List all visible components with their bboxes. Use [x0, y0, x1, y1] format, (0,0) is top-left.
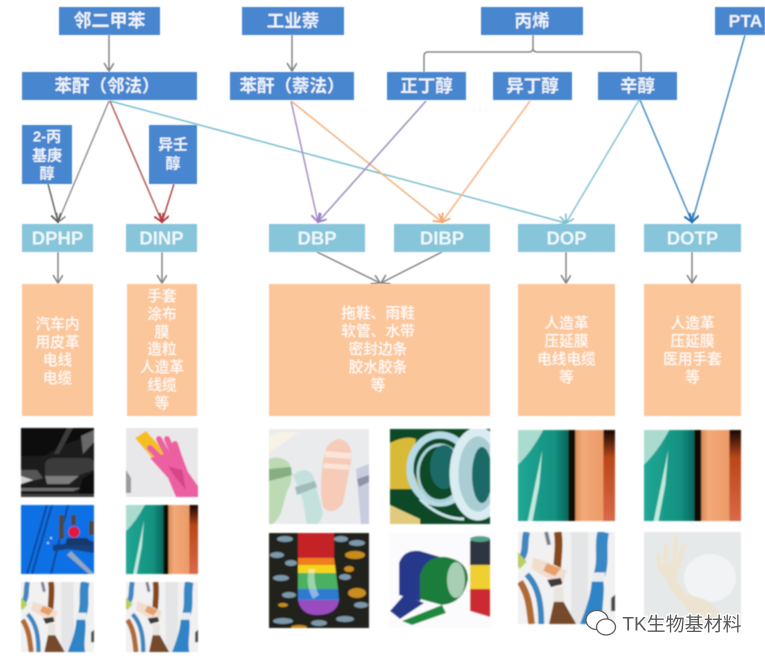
connector arrows — [48, 35, 745, 283]
box: 异壬醇: 异壬 — [158, 136, 188, 154]
box: PTA: PTA — [729, 11, 763, 31]
arrow: 工业萘 to 苯酐（萘法） — [291, 35, 293, 71]
application panels — [22, 284, 741, 416]
box: 2-丙基庚醇 — [22, 125, 72, 184]
arrow: 苯酐（邻法） to DPHP — [58, 101, 109, 222]
arrow: 苯酐（邻法） to DINP — [110, 101, 162, 222]
panel: DINP uses — [127, 284, 197, 416]
box: DINP: DINP — [139, 228, 184, 248]
box: 邻二甲苯 — [59, 7, 160, 35]
panel: DPHP uses: 汽车内 — [35, 316, 80, 333]
arrow: 异丁醇 to DIBP — [442, 101, 530, 222]
panel: DPHP uses — [22, 284, 93, 416]
arrow: 2-丙基庚醇 to DPHP — [48, 184, 58, 222]
text: TK生物基材料: TK生物基材料 — [622, 614, 742, 636]
panel: DOTP uses — [644, 284, 741, 416]
box: DOP — [518, 224, 615, 252]
box: 苯酐（邻法） — [22, 72, 197, 100]
box: 苯酐（邻法）: 苯酐（邻法） — [54, 76, 160, 96]
panel: DOTP uses: 人造革 — [670, 315, 715, 332]
box: 苯酐（萘法）: 苯酐（萘法） — [240, 76, 344, 96]
box: 正丁醇: 正丁醇 — [400, 76, 453, 96]
box: DINP — [126, 224, 197, 252]
box: 辛醇 — [598, 72, 677, 100]
panel: DINP uses: 等 — [155, 394, 170, 412]
panel: DBP and DIBP uses — [269, 284, 490, 416]
box: 异丁醇: 异丁醇 — [506, 76, 559, 96]
panel: DINP uses: 涂布 — [147, 305, 177, 323]
arrow: 苯酐（萘法） to DIBP — [291, 101, 442, 222]
box: 异丁醇 — [493, 72, 572, 100]
panel: DPHP uses: 电缆 — [43, 370, 72, 387]
panel: DBP and DIBP uses: 软管、水带 — [341, 322, 415, 340]
photo: pink glove and sponge — [125, 428, 199, 498]
box: DBP: DBP — [297, 228, 337, 248]
arrow: PTA to DOTP — [692, 35, 745, 222]
arrow: 苯酐（邻法） to DOP — [110, 101, 566, 223]
box: DPHP — [22, 224, 93, 252]
box: DIBP — [394, 224, 490, 252]
panel: DOP uses: 电线电缆 — [537, 351, 596, 368]
panel: DINP uses: 线缆 — [147, 377, 177, 394]
arrow: DOTP to uses — [691, 252, 693, 283]
photo: cables, DINP — [126, 582, 198, 652]
box: 异壬醇: 醇 — [165, 154, 181, 172]
photo: pastel slippers — [268, 429, 370, 525]
photo: white medical gloves — [644, 532, 742, 624]
icon: WeChat bubbles — [586, 610, 616, 635]
panel: DOP uses: 等 — [559, 368, 574, 386]
box: DOTP — [644, 224, 741, 252]
arrow: 异壬醇 to DINP — [162, 184, 174, 222]
photo: leather, DINP — [126, 505, 198, 574]
panel: DINP uses: 人造革 — [140, 359, 184, 376]
panel: DOTP uses: 医用手套 — [663, 351, 722, 368]
box: 正丁醇 — [387, 72, 466, 100]
panel: DOTP uses: 等 — [685, 368, 700, 386]
arrow: 辛醇 to DOP — [566, 100, 639, 223]
arrow: DBP to uses — [317, 252, 380, 283]
box: DBP — [269, 224, 365, 252]
panel: DINP uses: 造粒 — [147, 341, 177, 358]
box: 丙烯 — [481, 7, 583, 35]
box: PTA — [715, 7, 765, 35]
panel: DBP and DIBP uses: 胶水胶条 — [349, 359, 408, 376]
arrow: 苯酐（萘法） to DBP — [291, 101, 318, 222]
photo: electrician on power line — [20, 504, 96, 576]
photo: leather, DOP — [518, 430, 615, 521]
box: 2-丙基庚醇: 基庚 — [32, 146, 62, 164]
panel: DOP uses — [518, 284, 615, 416]
box: DIBP: DIBP — [420, 228, 464, 248]
arrow: DOP to uses — [565, 252, 567, 283]
photo: coloured tape rolls — [389, 535, 492, 626]
arrow: 邻二甲苯 to 苯酐（邻法） — [108, 35, 110, 71]
application photos — [21, 428, 741, 652]
watermark: WeChat source label — [586, 610, 742, 636]
bracket: 丙烯 to three alcohols — [424, 35, 641, 72]
panel: DINP uses: 膜 — [155, 323, 170, 341]
panel: DBP and DIBP uses: 密封边条 — [349, 340, 408, 358]
photo: cables, DPHP — [21, 582, 94, 652]
arrow: 正丁醇 to DBP — [318, 101, 426, 222]
arrow: DPHP to uses — [57, 252, 59, 283]
box: 工业萘 — [242, 7, 344, 35]
box: DOTP: DOTP — [667, 228, 718, 248]
panel: DBP and DIBP uses: 拖鞋、雨鞋 — [341, 305, 415, 322]
panel: DOP uses: 压延膜 — [544, 332, 589, 350]
panel: DOP uses: 人造革 — [544, 315, 589, 332]
box: 异壬醇 — [149, 125, 197, 184]
raw material boxes — [22, 7, 765, 184]
box: 苯酐（萘法） — [230, 72, 354, 100]
box: 2-丙基庚醇: 2-丙 — [33, 128, 61, 146]
arrow: 辛醇 to DOTP — [640, 100, 692, 222]
box: 辛醇: 辛醇 — [620, 76, 655, 96]
photo: leather, DOTP — [644, 430, 741, 521]
photo: rainbow rain boot — [268, 532, 370, 630]
box: 丙烯: 丙烯 — [514, 11, 550, 31]
panel: DPHP uses: 电线 — [43, 352, 72, 369]
panel: DOTP uses: 压延膜 — [670, 332, 715, 350]
box: 工业萘: 工业萘 — [267, 11, 320, 31]
panel: DPHP uses: 用皮革 — [35, 334, 80, 351]
arrow: DIBP to uses — [381, 252, 442, 283]
box: DPHP: DPHP — [32, 228, 83, 248]
box: 邻二甲苯: 邻二甲苯 — [74, 10, 146, 31]
arrow: DINP to uses — [161, 252, 163, 283]
plasticizer boxes — [22, 224, 741, 252]
photo: cables, DOP — [518, 532, 615, 624]
photo: hose coils — [388, 428, 492, 526]
box: DOP: DOP — [546, 228, 587, 248]
panel: DBP and DIBP uses: 等 — [371, 376, 386, 394]
box: 2-丙基庚醇: 醇 — [39, 164, 55, 182]
panel: DINP uses: 手套 — [147, 288, 177, 305]
photo: car interior — [20, 426, 96, 498]
